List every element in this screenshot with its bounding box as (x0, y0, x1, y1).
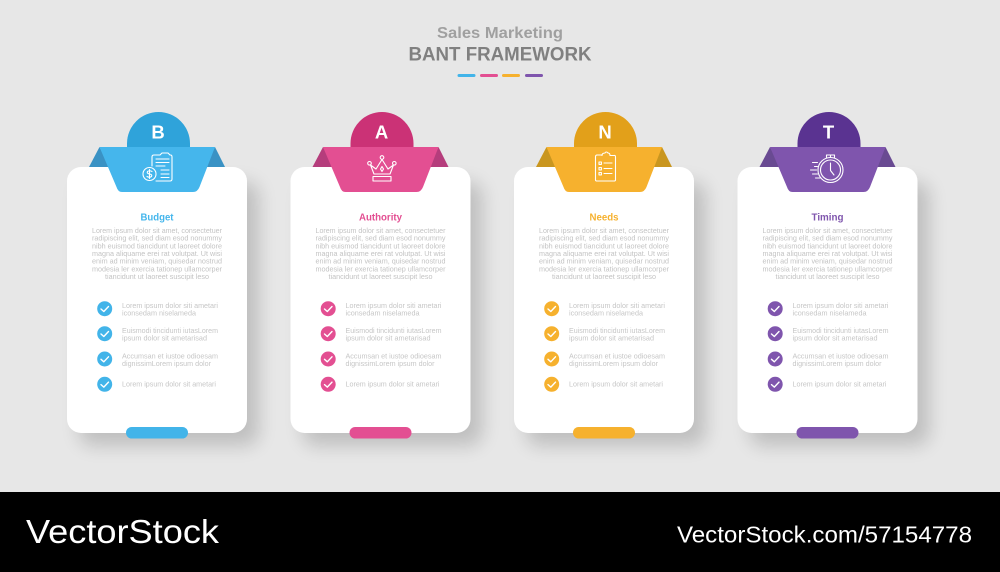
banner (770, 147, 886, 192)
paragraph: magna aliquame erei rat volutpat. Ut wisi (316, 249, 446, 258)
paragraph: Lorem ipsum dolor sit amet, consectetuer (316, 226, 446, 235)
paragraph (92, 226, 223, 281)
bottom pill (796, 427, 858, 438)
paragraph: magna aliquame erei rat volutpat. Ut wisi (539, 249, 669, 258)
letter A: A (375, 122, 388, 142)
paragraph: tiancidunt ut laoreet suscipit leso (552, 272, 656, 281)
title: BANT FRAMEWORK (408, 44, 592, 66)
check list: ipsum dolor sit ametarisad (122, 334, 207, 343)
paragraph: Lorem ipsum dolor sit amet, consectetuer (92, 226, 223, 235)
bottom pill (573, 427, 635, 438)
paragraph (762, 226, 893, 281)
check list: ipsum dolor sit ametarisad (569, 334, 654, 343)
letter B: B (151, 122, 165, 142)
bottom pill (350, 427, 412, 438)
heading: Authority (359, 212, 402, 224)
check list (321, 301, 442, 392)
heading: Needs (590, 212, 619, 224)
left fold (536, 147, 557, 167)
check list: dignissimLorem ipsum dolor (792, 359, 882, 368)
paragraph: modesia ler exercia tationep ullamcorper (92, 264, 223, 273)
paragraph: nibh euismod tiancidunt ut laoreet dolore (316, 241, 446, 250)
paragraph: enim ad minim veniam, quisedar nostrud (539, 257, 669, 266)
check list: Lorem ipsum dolor sit ametari (122, 379, 216, 388)
banner (100, 147, 215, 192)
check list: Euismodi tincidunti iutasLorem (122, 326, 218, 335)
banner (323, 147, 438, 192)
check list: Accumsan et iustoe odioesam (569, 352, 665, 361)
check list: Lorem ipsum dolor siti ametari (569, 301, 665, 310)
banner (546, 147, 662, 192)
check list: dignissimLorem ipsum dolor (569, 359, 659, 368)
check list: iconsedam niselameda (346, 308, 420, 317)
paragraph: Lorem ipsum dolor sit amet, consectetuer (539, 226, 670, 235)
left fold (89, 147, 110, 167)
paragraph: nibh euismod tiancidunt ut laoreet dolore (92, 241, 222, 250)
check list (544, 301, 665, 392)
footer bar (0, 492, 1000, 572)
check list: Lorem ipsum dolor sit ametari (792, 379, 887, 388)
footer brand: VectorStock (26, 513, 220, 550)
panel: timing (738, 112, 930, 446)
check list: dignissimLorem ipsum dolor (346, 359, 435, 368)
check list: Accumsan et iustoe odioesam (346, 352, 442, 361)
paragraph: nibh euismod tiancidunt ut laoreet dolore (539, 241, 669, 250)
check list: dignissimLorem ipsum dolor (122, 359, 212, 368)
check list: iconsedam niselameda (792, 308, 867, 317)
letter N: N (598, 122, 612, 142)
paragraph: magna aliquame erei rat volutpat. Ut wisi (92, 249, 222, 258)
panel: authority (290, 112, 482, 446)
paragraph: magna aliquame erei rat volutpat. Ut wisi (762, 249, 893, 258)
paragraph: enim ad minim veniam, quisedar nostrud (316, 257, 446, 266)
check list: ipsum dolor sit ametarisad (346, 334, 431, 343)
check list: Lorem ipsum dolor sit ametari (569, 379, 663, 388)
check list: Lorem ipsum dolor sit ametari (346, 379, 440, 388)
paragraph: enim ad minim veniam, quisedar nostrud (92, 257, 222, 266)
icon: crown (368, 156, 396, 181)
heading: Budget (140, 212, 174, 224)
paragraph: radipiscing elit, sed diam esod nonummy (539, 234, 669, 243)
check list: Lorem ipsum dolor siti ametari (346, 301, 442, 310)
paragraph: radipiscing elit, sed diam esod nonummy (316, 234, 446, 243)
paragraph: modesia ler exercia tationep ullamcorper (539, 264, 670, 273)
heading: Timing (812, 212, 844, 224)
title (408, 25, 592, 66)
check list: Accumsan et iustoe odioesam (792, 352, 889, 361)
letter T: T (823, 122, 835, 142)
check list: iconsedam niselameda (569, 308, 643, 317)
right fold (876, 147, 896, 167)
paragraph: tiancidunt ut laoreet suscipit leso (105, 272, 209, 281)
check list: Accumsan et iustoe odioesam (122, 352, 218, 361)
icon: stopwatch (810, 155, 843, 182)
letter tab circle (127, 112, 190, 147)
paragraph: enim ad minim veniam, quisedar nostrud (762, 257, 892, 266)
check list: ipsum dolor sit ametarisad (792, 334, 878, 343)
panel: budget (67, 112, 259, 446)
right fold (652, 147, 672, 167)
check list: Lorem ipsum dolor siti ametari (792, 301, 889, 310)
right fold (205, 147, 225, 167)
letter tab circle (798, 112, 860, 147)
left fold (312, 147, 334, 167)
paragraph (539, 226, 670, 281)
paragraph (316, 226, 446, 281)
icon: checklist clipboard (596, 152, 616, 181)
icon: clipboard and dollar coin (143, 153, 172, 181)
letter tab circle (574, 112, 637, 147)
paragraph: modesia ler exercia tationep ullamcorper (316, 264, 446, 273)
paragraph: modesia ler exercia tationep ullamcorper (762, 264, 893, 273)
left fold (760, 147, 780, 167)
footer url: VectorStock.com/57154778 (677, 522, 972, 548)
check list (97, 301, 218, 392)
paragraph: radipiscing elit, sed diam esod nonummy (92, 234, 222, 243)
paragraph: tiancidunt ut laoreet suscipit leso (328, 272, 432, 281)
right fold (428, 147, 448, 167)
check list: Lorem ipsum dolor siti ametari (122, 301, 218, 310)
check list: iconsedam niselameda (122, 308, 196, 317)
bottom pill (126, 427, 188, 438)
paragraph: Lorem ipsum dolor sit amet, consectetuer (762, 226, 893, 235)
check list: Euismodi tincidunti iutasLorem (346, 326, 442, 335)
paragraph: radipiscing elit, sed diam esod nonummy (762, 234, 893, 243)
paragraph: nibh euismod tiancidunt ut laoreet dolore (762, 241, 892, 250)
title colour dashes (458, 74, 543, 77)
paragraph: tiancidunt ut laoreet suscipit leso (776, 272, 880, 281)
check list: Euismodi tincidunti iutasLorem (792, 326, 889, 335)
title: Sales Marketing (437, 25, 563, 42)
check list (768, 301, 889, 392)
letter tab circle (350, 112, 414, 147)
check list: Euismodi tincidunti iutasLorem (569, 326, 665, 335)
panel: needs (514, 112, 706, 446)
